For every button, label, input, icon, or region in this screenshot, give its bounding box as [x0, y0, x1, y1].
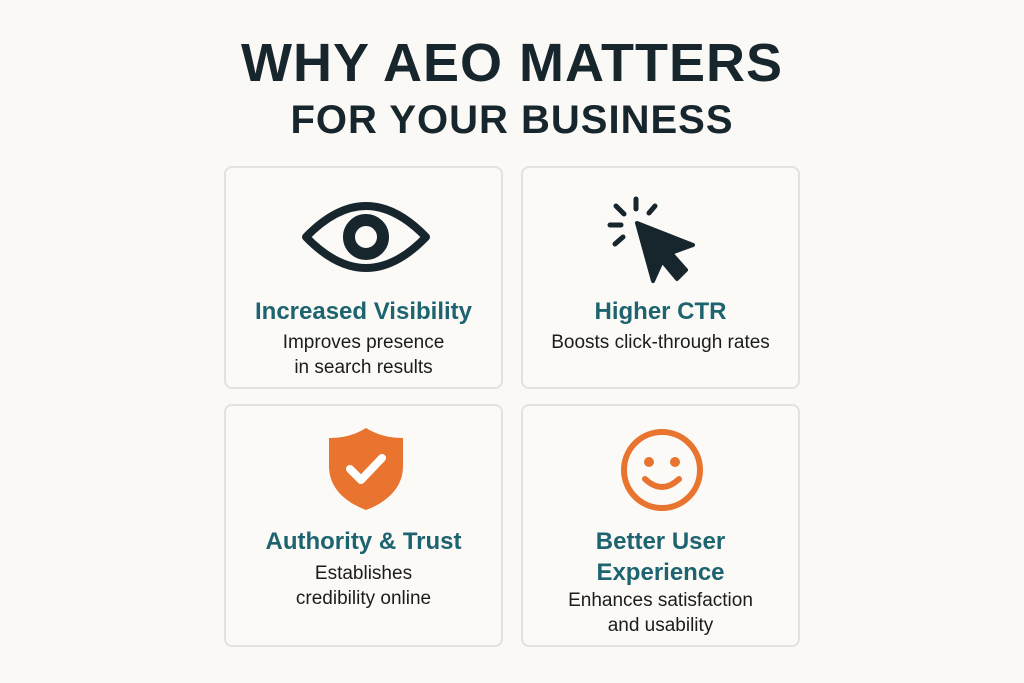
description — [568, 590, 753, 636]
description: in search results — [294, 357, 433, 378]
description: Establishes — [315, 563, 412, 584]
panel: higher ctr — [521, 166, 800, 389]
icon: cursor — [608, 196, 696, 284]
description: Boosts click-through rates — [551, 332, 770, 353]
description: Enhances satisfaction — [568, 590, 753, 611]
heading: Higher CTR — [594, 298, 726, 325]
heading: Increased Visibility — [255, 298, 472, 325]
description — [296, 563, 431, 609]
heading: Experience — [596, 559, 725, 586]
icon: eye — [302, 202, 430, 272]
panel: increased visibility — [224, 166, 503, 389]
heading: Better User — [596, 528, 725, 555]
heading: Authority & Trust — [266, 528, 462, 555]
description: Improves presence — [283, 332, 444, 353]
title: WHY AEO MATTERS — [241, 33, 783, 93]
icon: smiley — [621, 429, 703, 511]
description — [283, 332, 444, 378]
icon: shield — [329, 428, 403, 510]
panel: authority & trust — [224, 404, 503, 647]
description: credibility online — [296, 588, 431, 609]
description: and usability — [608, 615, 713, 636]
subtitle: FOR YOUR BUSINESS — [290, 98, 734, 142]
heading — [596, 528, 725, 586]
panel: better user experience — [521, 404, 800, 647]
